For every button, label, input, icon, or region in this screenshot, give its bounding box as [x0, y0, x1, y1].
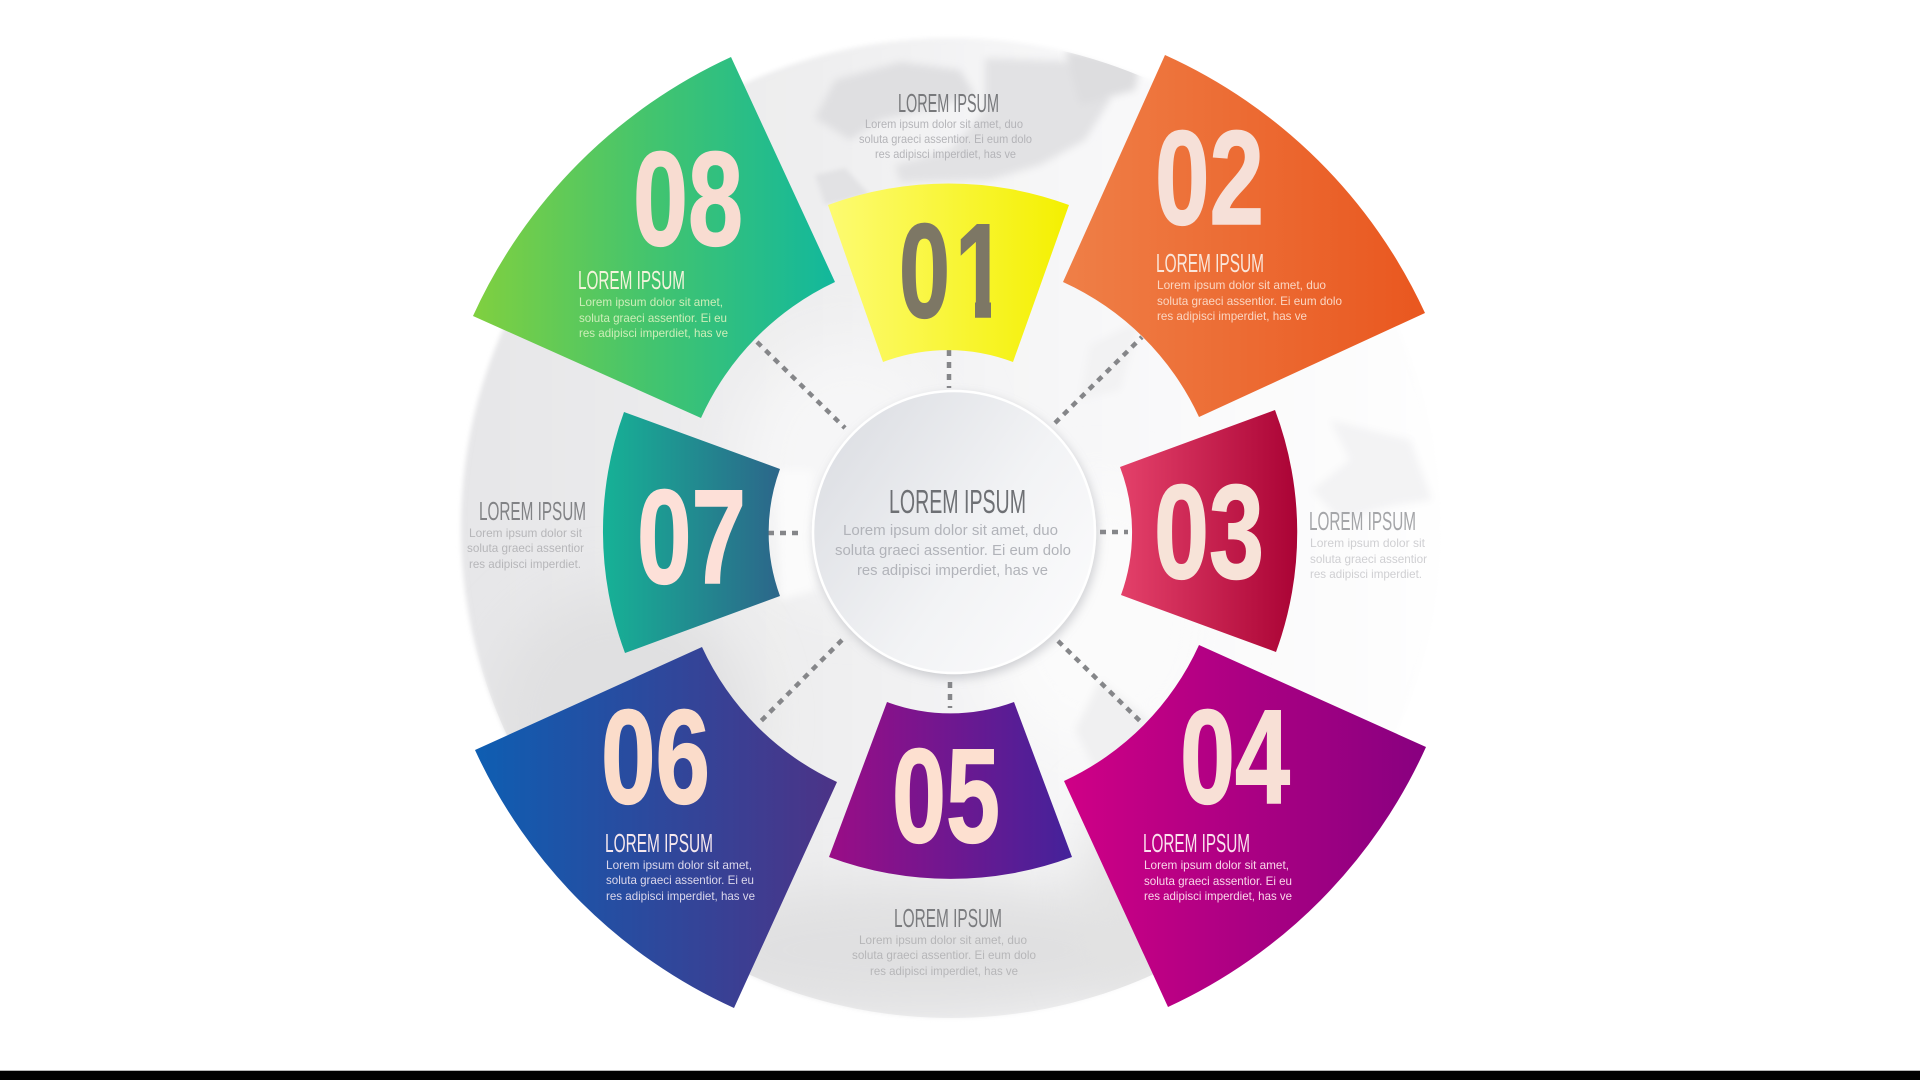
number 06: 06 — [601, 683, 710, 832]
number 02: 02 — [1155, 104, 1264, 253]
text 08 — [579, 295, 728, 340]
text 04: Lorem ipsum dolor sit amet, — [1144, 858, 1289, 872]
segment 04 — [1064, 645, 1426, 1007]
segment 08 — [473, 57, 835, 418]
world map globe background — [461, 38, 1441, 1020]
center text: res adipisci imperdiet, has ve — [857, 562, 1048, 579]
segment 05 — [829, 702, 1072, 879]
caption for 07: LOREM IPSUM — [479, 496, 586, 526]
text 04: soluta graeci assentior. Ei eu — [1144, 874, 1292, 888]
text 04 — [1144, 858, 1292, 903]
caption for 03: Lorem ipsum dolor sit — [1310, 536, 1426, 550]
heading 02: LOREM IPSUM — [1156, 248, 1264, 278]
number 08: 08 — [633, 125, 743, 274]
segment 07 — [603, 412, 780, 653]
center text: soluta graeci assentior. Ei eum dolo — [835, 542, 1071, 559]
center text: Lorem ipsum dolor sit amet, duo — [843, 522, 1058, 539]
caption for 03: soluta graeci assentior — [1310, 552, 1427, 566]
caption for 05: Lorem ipsum dolor sit amet, duo — [859, 933, 1027, 947]
caption for 03 — [1309, 506, 1427, 581]
segment 01 — [828, 183, 1069, 362]
caption for 01: LOREM IPSUM — [898, 88, 999, 118]
heading 04: LOREM IPSUM — [1143, 828, 1250, 858]
text 04: res adipisci imperdiet, has ve — [1144, 889, 1292, 903]
segment 03 — [1120, 410, 1297, 652]
heading 08: LOREM IPSUM — [578, 265, 685, 295]
black bottom bar — [0, 1070, 1920, 1080]
caption for 05: soluta graeci assentior. Ei eum dolo — [852, 948, 1036, 962]
text 08: res adipisci imperdiet, has ve — [579, 326, 728, 340]
text 06: soluta graeci assentior. Ei eu — [606, 873, 754, 887]
text 06: res adipisci imperdiet, has ve — [606, 889, 755, 903]
number 03: 03 — [1154, 458, 1264, 607]
text 02: res adipisci imperdiet, has ve — [1157, 309, 1307, 323]
text 06: Lorem ipsum dolor sit amet, — [606, 858, 752, 872]
text 08: soluta graeci assentior. Ei eu — [579, 311, 727, 325]
number 01: 0 — [899, 197, 950, 346]
number 01: 1 — [955, 197, 1006, 346]
caption for 05: res adipisci imperdiet, has ve — [870, 964, 1018, 978]
caption for 01: Lorem ipsum dolor sit amet, duo — [865, 117, 1023, 131]
number 07: 07 — [637, 463, 746, 612]
caption for 01: soluta graeci assentior. Ei eum dolo — [859, 132, 1032, 146]
number 04: 04 — [1180, 683, 1290, 832]
text 02 — [1157, 278, 1342, 323]
caption for 07: soluta graeci assentior — [467, 541, 584, 555]
caption for 05 — [852, 903, 1036, 978]
text 06 — [606, 858, 755, 903]
heading 06: LOREM IPSUM — [605, 828, 713, 858]
segment 06 — [475, 647, 837, 1008]
segment 02 — [1063, 55, 1425, 417]
number 05: 05 — [892, 722, 1000, 871]
caption for 01: res adipisci imperdiet, has ve — [875, 147, 1016, 161]
text 02: soluta graeci assentior. Ei eum dolo — [1157, 294, 1342, 308]
caption for 05: LOREM IPSUM — [894, 903, 1002, 933]
caption for 01 — [859, 88, 1032, 161]
center text — [835, 522, 1071, 579]
text 02: Lorem ipsum dolor sit amet, duo — [1157, 278, 1326, 292]
text 08: Lorem ipsum dolor sit amet, — [579, 295, 723, 309]
dashed connector lines — [757, 337, 1142, 722]
caption for 07: Lorem ipsum dolor sit — [469, 526, 583, 540]
number 01 — [902, 222, 991, 320]
center circle — [813, 391, 1095, 673]
caption for 03: LOREM IPSUM — [1309, 506, 1416, 536]
center heading: LOREM IPSUM — [889, 483, 1026, 520]
caption for 07 — [467, 496, 586, 571]
caption for 07: res adipisci imperdiet. — [469, 557, 581, 571]
caption for 03: res adipisci imperdiet. — [1310, 567, 1422, 581]
